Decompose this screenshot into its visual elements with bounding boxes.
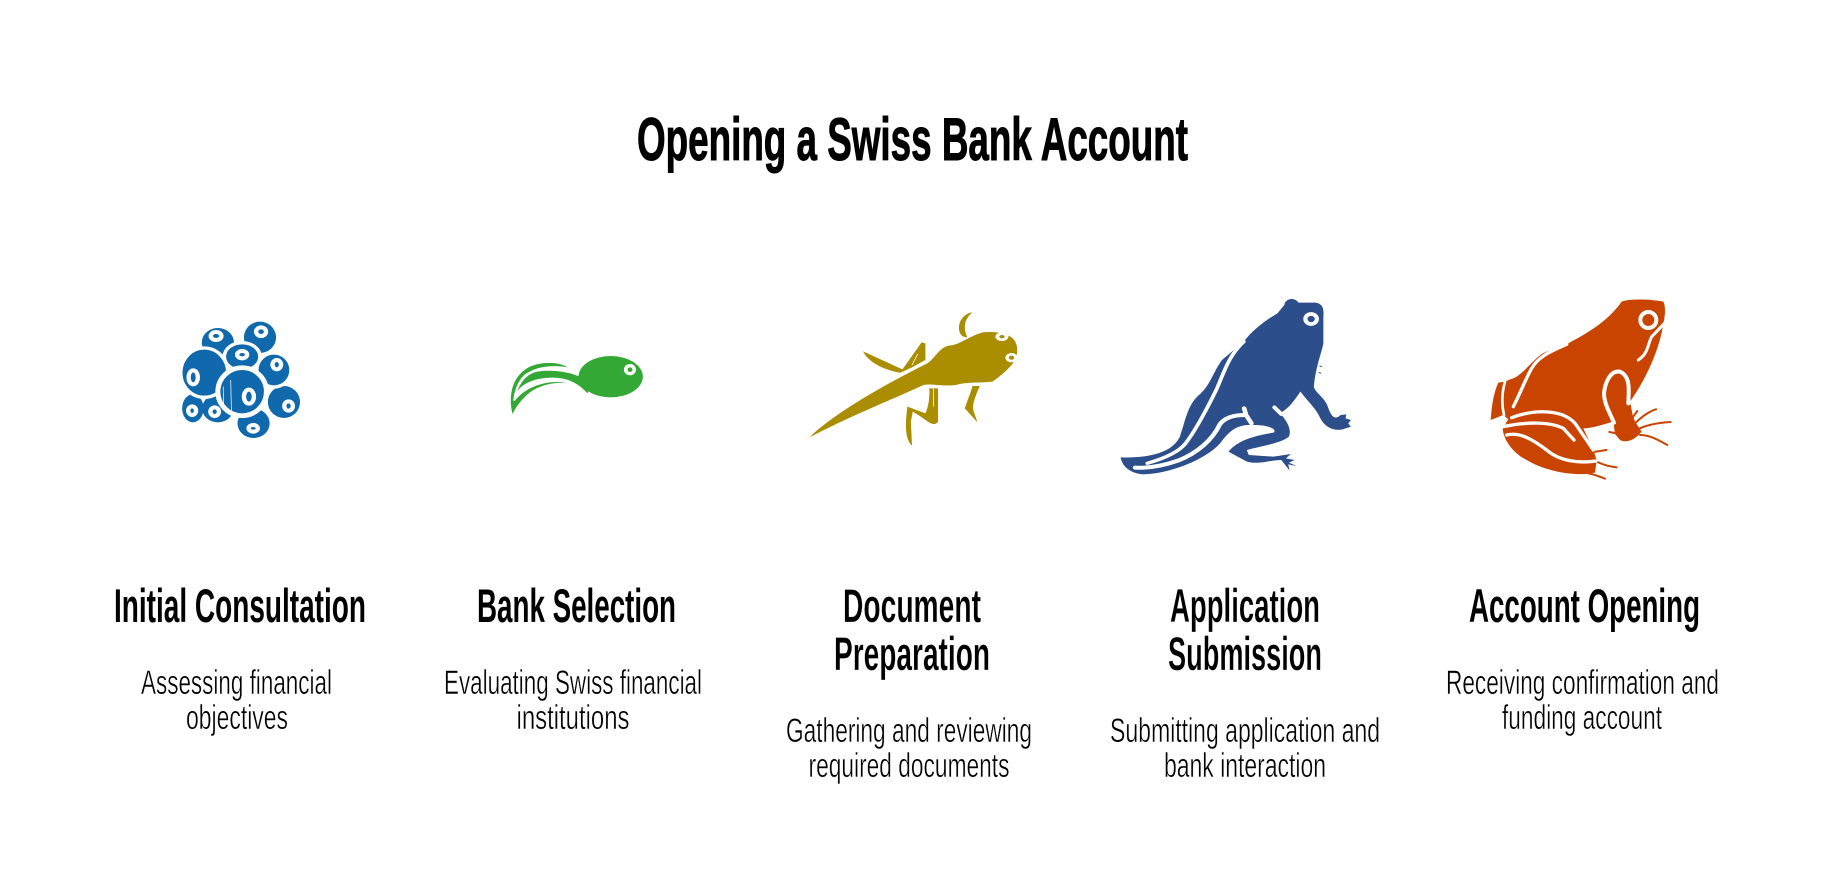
step 5: account opening [1446, 300, 1719, 737]
title: Opening a Swiss Bank Account [637, 106, 1188, 173]
description: document preparation [786, 712, 1032, 785]
icon: adult frog [1491, 300, 1671, 479]
description: bank selection: institutions [516, 699, 630, 737]
heading: initial consultation: Initial Consultation [114, 579, 366, 632]
heading: document preparation [834, 579, 990, 680]
heading: bank selection: Bank Selection [477, 579, 676, 632]
step 3: document preparation [786, 312, 1032, 785]
icon: froglet with tail [1121, 299, 1351, 474]
heading: document preparation: Document [843, 579, 981, 632]
description: document preparation: Gathering and reviewing [786, 712, 1032, 750]
description: bank selection [444, 664, 702, 737]
heading: application submission: Submission [1168, 627, 1322, 680]
description: initial consultation: Assessing financial [141, 664, 332, 702]
description: initial consultation: objectives [186, 699, 288, 737]
frog eye [1305, 314, 1317, 324]
heading: application submission [1168, 579, 1322, 680]
icon: frog eggs [181, 322, 300, 438]
description: application submission [1110, 712, 1380, 785]
frog toes [1588, 409, 1671, 479]
description: application submission: bank interaction [1164, 747, 1326, 785]
description: account opening: funding account [1502, 699, 1662, 737]
step 2: bank selection [444, 356, 702, 737]
step 1: initial consultation [114, 322, 366, 737]
description: document preparation: required documents [808, 747, 1010, 785]
heading: application submission: Application [1170, 579, 1320, 632]
description: account opening [1446, 664, 1719, 737]
description: bank selection: Evaluating Swiss financial [444, 664, 702, 702]
heading: document preparation: Preparation [834, 627, 990, 680]
description: application submission: Submitting application and [1110, 712, 1380, 750]
step 4: application submission [1110, 299, 1380, 785]
icon: tadpole with legs [809, 312, 1018, 446]
icon: tadpole [511, 356, 643, 414]
description: initial consultation [141, 664, 332, 737]
